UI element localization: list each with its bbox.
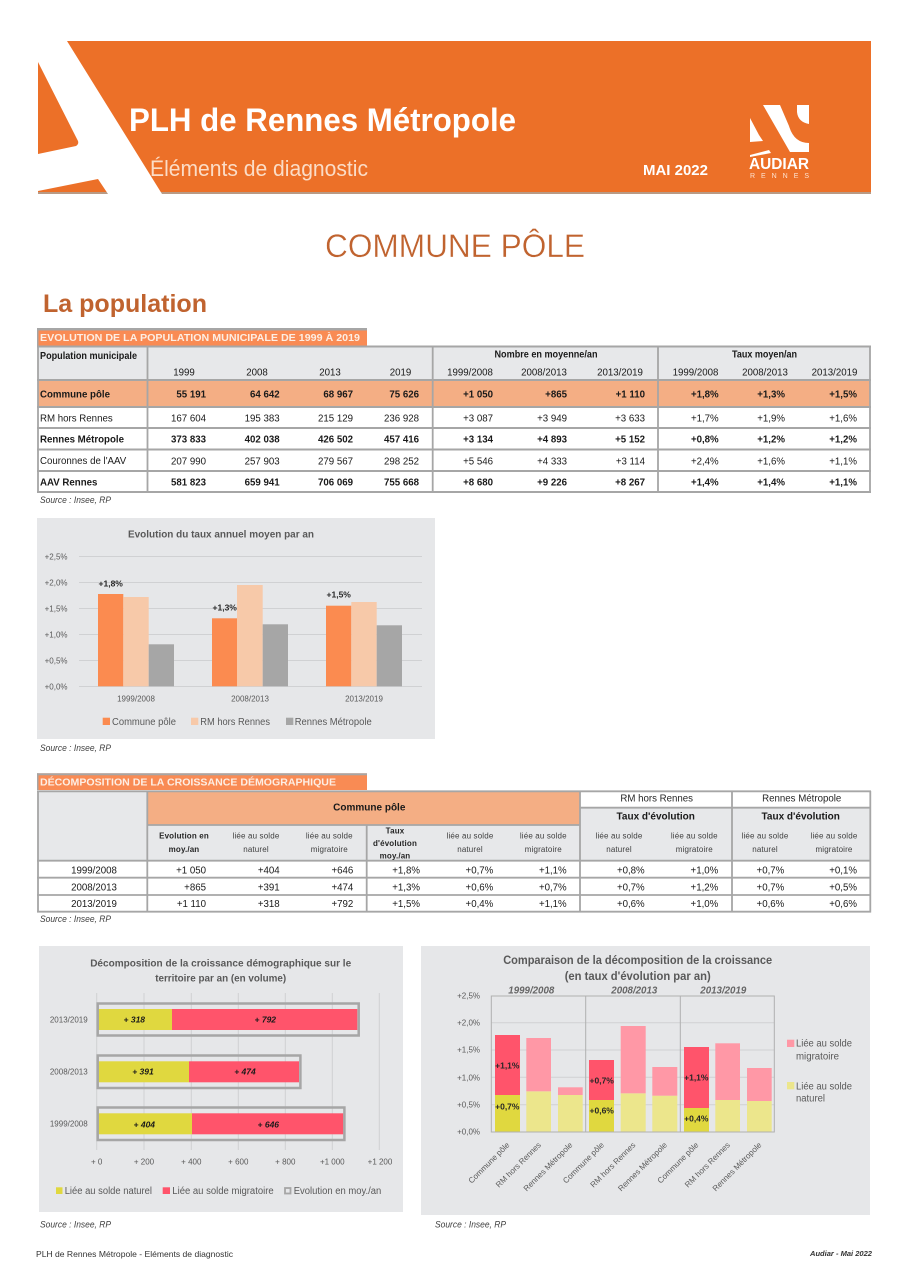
table heading: decomposition de la croissance: DÉCOMPOSITION DE LA CROISSANCE DÉMOGRAPHIQUE bbox=[40, 776, 336, 788]
row: 1999/2008: +404 bbox=[258, 865, 280, 876]
x axis labels: + 200 bbox=[134, 1157, 155, 1166]
column sub-headers: liée au solde bbox=[306, 832, 353, 841]
legend: RM hors Rennes bbox=[200, 717, 270, 728]
x axis labels bbox=[91, 1157, 393, 1166]
row: Rennes Métropole: +4 893 bbox=[537, 435, 568, 446]
y axis labels: 1999/2008 bbox=[50, 1119, 88, 1128]
column headers: Taux moyen/an bbox=[732, 350, 797, 360]
row: RM hors Rennes: +3 087 bbox=[463, 414, 493, 425]
column headers: 1999/2008 bbox=[673, 368, 718, 378]
row: 1999/2008: +1,1% bbox=[539, 865, 567, 876]
table heading: evolution de la population bbox=[37, 328, 367, 346]
banner date: MAI 2022 bbox=[643, 162, 708, 179]
y axis labels bbox=[45, 552, 68, 692]
group headers bbox=[333, 794, 841, 822]
row: 2013/2019: +0,4% bbox=[466, 899, 494, 910]
row: Rennes Métropole: 373 833 bbox=[171, 435, 207, 446]
column sub-headers: migratoire bbox=[311, 845, 348, 854]
row: Commune pôle: +1,5% bbox=[829, 390, 857, 401]
rotated category labels: RM hors Rennes bbox=[683, 1141, 732, 1189]
column headers: Nombre en moyenne/an bbox=[494, 350, 598, 360]
row: AAV Rennes: +9 226 bbox=[537, 478, 568, 489]
row: AAV Rennes: 755 668 bbox=[384, 478, 420, 489]
legend: naturel bbox=[796, 1094, 825, 1105]
column headers: 2013/2019 bbox=[812, 368, 857, 378]
column sub-headers: naturel bbox=[243, 845, 269, 854]
data labels: +0,7% bbox=[495, 1101, 520, 1111]
legend: Liée au solde naturel bbox=[65, 1186, 152, 1197]
row: AAV Rennes: 706 069 bbox=[318, 478, 354, 489]
row: AAV Rennes: 581 823 bbox=[171, 478, 207, 489]
column sub-headers: naturel bbox=[457, 845, 483, 854]
group headers: RM hors Rennes bbox=[620, 794, 693, 805]
data labels bbox=[495, 1060, 709, 1123]
chart title: Décomposition de la croissance démographique sur le bbox=[90, 958, 351, 970]
row: RM hors Rennes: +1,7% bbox=[691, 414, 719, 425]
row: Couronnes de l'AAV bbox=[40, 456, 857, 467]
y axis labels: +1,0% bbox=[457, 1073, 480, 1082]
x axis labels: 2013/2019 bbox=[345, 694, 383, 703]
row: 2013/2019: +318 bbox=[258, 899, 280, 910]
row: 1999/2008 bbox=[71, 865, 857, 876]
column sub-headers: migratoire bbox=[676, 845, 713, 854]
row: Commune pôle: 68 967 bbox=[323, 390, 353, 401]
column headers: 2013 bbox=[319, 368, 341, 378]
legend: Evolution en moy./an bbox=[294, 1186, 381, 1197]
row: 2008/2013: +474 bbox=[331, 882, 354, 893]
row: 2008/2013 bbox=[71, 882, 857, 893]
row: 2013/2019: +1,1% bbox=[539, 899, 567, 910]
column sub-headers: migratoire bbox=[525, 845, 562, 854]
column sub-headers: Evolution en bbox=[159, 832, 209, 841]
row: Commune pôle: +1,3% bbox=[757, 390, 785, 401]
row: Rennes Métropole: 457 416 bbox=[384, 435, 420, 446]
legend: Liée au solde bbox=[796, 1039, 852, 1050]
column sub-headers: Taux bbox=[386, 826, 405, 835]
legend: Liée au solde migratoire bbox=[172, 1186, 274, 1197]
chart: evolution du taux annuel moyen bbox=[37, 518, 435, 739]
period labels: 1999/2008 bbox=[508, 985, 555, 996]
period labels: 2008/2013 bbox=[610, 985, 658, 996]
column sub-headers: liée au solde bbox=[520, 832, 567, 841]
chart title: territoire par an (en volume) bbox=[155, 973, 286, 985]
column sub-headers: liée au solde bbox=[447, 832, 494, 841]
row: AAV Rennes bbox=[40, 478, 857, 489]
rotated category labels: Commune pôle bbox=[656, 1140, 701, 1185]
row: 1999/2008: +0,8% bbox=[617, 865, 645, 876]
row: Rennes Métropole bbox=[40, 435, 857, 446]
row: Couronnes de l'AAV: 298 252 bbox=[384, 456, 419, 467]
stacked bar 1999/2008: + 646 bbox=[258, 1119, 279, 1129]
rotated category labels: RM hors Rennes bbox=[589, 1141, 637, 1189]
row: AAV Rennes: +8 680 bbox=[463, 478, 493, 489]
group headers: Rennes Métropole bbox=[762, 794, 841, 805]
row: Commune pôle: 55 191 bbox=[176, 390, 207, 401]
legend: migratoire bbox=[796, 1051, 839, 1062]
legend bbox=[787, 1039, 852, 1105]
row: Commune pôle: 75 626 bbox=[389, 390, 420, 401]
bars bbox=[98, 585, 402, 686]
row: AAV Rennes: +1,1% bbox=[829, 478, 857, 489]
row: 2008/2013: +1,3% bbox=[392, 882, 420, 893]
source note: Source : Insee, RP bbox=[40, 1219, 112, 1230]
row: RM hors Rennes: RM hors Rennes bbox=[40, 414, 113, 425]
column sub-headers: migratoire bbox=[815, 845, 853, 854]
row: Commune pôle: +865 bbox=[545, 390, 568, 401]
stacked bar 2013/2019 bbox=[98, 1004, 359, 1036]
column headers: Population municipale bbox=[40, 351, 138, 362]
row: 2013/2019: +0,6% bbox=[617, 899, 645, 910]
row: 2008/2013: +1,2% bbox=[691, 882, 719, 893]
y axis labels: 2013/2019 bbox=[50, 1015, 88, 1024]
rotated category labels: RM hors Rennes bbox=[494, 1141, 543, 1189]
data labels: +1,3% bbox=[213, 603, 237, 613]
stacked bar 2013/2019: + 792 bbox=[255, 1014, 276, 1024]
table heading: evolution de la population: EVOLUTION DE LA POPULATION MUNICIPALE DE 1999 À 2019 bbox=[40, 331, 360, 344]
row: 1999/2008: +0,1% bbox=[829, 865, 857, 876]
stacked bar 2013/2019: + 318 bbox=[124, 1014, 145, 1024]
row: Rennes Métropole: +5 152 bbox=[615, 435, 645, 446]
row: Commune pôle: Commune pôle bbox=[40, 390, 111, 401]
row: 2008/2013: +0,7% bbox=[757, 882, 785, 893]
y axis labels: +2,0% bbox=[457, 1018, 480, 1027]
logo: Audiar Rennes: AUDIAR bbox=[749, 156, 809, 173]
row: Rennes Métropole: +1,2% bbox=[757, 435, 785, 446]
column sub-headers: liée au solde bbox=[596, 832, 643, 841]
legend: Rennes Métropole bbox=[295, 717, 372, 728]
row: Couronnes de l'AAV: +4 333 bbox=[537, 456, 567, 467]
row: Commune pôle: +1 050 bbox=[463, 390, 493, 401]
column sub-headers: liée au solde bbox=[742, 832, 789, 841]
stacked bar 2008/2013: + 474 bbox=[234, 1066, 256, 1076]
row: 1999/2008: +0,7% bbox=[466, 865, 494, 876]
source note: Source : Insee, RP bbox=[435, 1219, 507, 1230]
banner title: PLH de Rennes Métropole bbox=[129, 102, 516, 138]
banner subtitle: Éléments de diagnostic bbox=[150, 156, 368, 181]
table: population municipale bbox=[37, 346, 871, 493]
column sub-headers: liée au solde bbox=[811, 832, 858, 841]
row: 2013/2019: +1,5% bbox=[392, 899, 420, 910]
data labels: +1,8% bbox=[99, 579, 123, 589]
column headers: 1999 bbox=[173, 368, 195, 378]
row: AAV Rennes: +8 267 bbox=[615, 478, 645, 489]
row: 1999/2008: 1999/2008 bbox=[71, 865, 117, 876]
row: Couronnes de l'AAV: +5 546 bbox=[463, 456, 493, 467]
legend bbox=[56, 1186, 381, 1197]
legend: Commune pôle bbox=[112, 717, 176, 728]
row: Couronnes de l'AAV: 207 990 bbox=[171, 456, 207, 467]
data labels: +1,1% bbox=[684, 1072, 709, 1082]
row: AAV Rennes: 659 941 bbox=[245, 478, 280, 489]
header banner bbox=[38, 41, 871, 194]
source note: Source : Insee, RP bbox=[40, 914, 112, 925]
y axis labels: +0,5% bbox=[457, 1101, 480, 1110]
row: 1999/2008: +646 bbox=[331, 865, 353, 876]
rotated category labels: Commune pôle bbox=[467, 1140, 512, 1185]
group headers: Taux d'évolution bbox=[762, 811, 840, 822]
row: RM hors Rennes: 215 129 bbox=[318, 414, 353, 425]
column headers bbox=[40, 350, 857, 378]
y axis labels: +0,0% bbox=[457, 1128, 480, 1137]
footer left: PLH de Rennes Métropole - Eléments de diagnostic bbox=[36, 1249, 234, 1259]
column sub-headers: liée au solde bbox=[233, 832, 280, 841]
x axis labels: + 800 bbox=[275, 1157, 296, 1166]
row: 2013/2019: +1 110 bbox=[177, 899, 207, 910]
row: Rennes Métropole: 426 502 bbox=[318, 435, 353, 446]
chart title bbox=[90, 958, 351, 985]
y axis labels: +2,5% bbox=[45, 552, 68, 562]
row: Commune pôle bbox=[40, 390, 857, 401]
row: 1999/2008: +1,8% bbox=[392, 865, 420, 876]
row: Couronnes de l'AAV: +3 114 bbox=[616, 456, 646, 467]
chart title bbox=[503, 955, 772, 983]
legend bbox=[103, 717, 372, 728]
row: 2013/2019: +0,6% bbox=[757, 899, 785, 910]
row: Rennes Métropole: +1,2% bbox=[829, 435, 857, 446]
row: 2013/2019: +1,0% bbox=[691, 899, 719, 910]
row: Commune pôle: 64 642 bbox=[250, 390, 280, 401]
x axis labels: 2008/2013 bbox=[231, 694, 269, 703]
table heading: decomposition de la croissance bbox=[37, 773, 367, 790]
row: 2013/2019: 2013/2019 bbox=[71, 899, 117, 910]
x axis labels: +1 000 bbox=[320, 1157, 345, 1166]
row: Commune pôle: +1 110 bbox=[616, 390, 645, 401]
row: 2008/2013: 2008/2013 bbox=[71, 882, 117, 893]
y axis labels: +0,5% bbox=[45, 656, 68, 666]
y axis labels: +2,5% bbox=[457, 991, 480, 1000]
row: 2008/2013: +865 bbox=[184, 882, 206, 893]
stacked bar 1999/2008 bbox=[98, 1108, 344, 1140]
x axis labels bbox=[117, 694, 383, 703]
y axis labels: +1,0% bbox=[45, 630, 68, 640]
column headers: 2019 bbox=[390, 368, 411, 378]
row: Couronnes de l'AAV: 279 567 bbox=[318, 456, 353, 467]
column headers: 1999/2008 bbox=[447, 368, 493, 378]
period labels bbox=[508, 985, 747, 996]
row: RM hors Rennes: 167 604 bbox=[171, 414, 207, 425]
row: RM hors Rennes: 236 928 bbox=[384, 414, 419, 425]
y axis labels bbox=[457, 991, 480, 1137]
row: RM hors Rennes: +3 633 bbox=[615, 414, 645, 425]
column headers: 2013/2019 bbox=[597, 368, 643, 378]
x axis labels: + 0 bbox=[91, 1157, 103, 1166]
row: RM hors Rennes: +1,9% bbox=[757, 414, 785, 425]
x axis labels: + 600 bbox=[228, 1157, 249, 1166]
data labels bbox=[99, 579, 351, 613]
rotated category labels bbox=[467, 1140, 764, 1193]
period labels: 2013/2019 bbox=[699, 985, 747, 996]
chart: decomposition en volume bbox=[39, 946, 403, 1212]
row: Couronnes de l'AAV: 257 903 bbox=[245, 456, 280, 467]
row: 1999/2008: +1 050 bbox=[176, 865, 207, 876]
rotated category labels: Rennes Métropole bbox=[711, 1140, 764, 1193]
stacked bar 2008/2013: + 391 bbox=[132, 1066, 154, 1076]
data labels: +1,5% bbox=[327, 590, 351, 600]
rotated category labels: Commune pôle bbox=[561, 1140, 606, 1185]
row: RM hors Rennes: +1,6% bbox=[829, 414, 857, 425]
row: RM hors Rennes: 195 383 bbox=[245, 414, 280, 425]
row: 2013/2019: +792 bbox=[331, 899, 353, 910]
logo: Audiar Rennes: RENNES bbox=[750, 173, 809, 180]
rotated category labels: Rennes Métropole bbox=[522, 1140, 575, 1193]
column headers: 2008/2013 bbox=[521, 368, 567, 378]
row: 1999/2008: +1,0% bbox=[691, 865, 719, 876]
row: Commune pôle: +1,8% bbox=[691, 390, 719, 401]
data labels: +0,7% bbox=[590, 1076, 614, 1086]
column sub-headers bbox=[159, 826, 858, 860]
row: 2008/2013: +0,7% bbox=[539, 882, 567, 893]
column headers: 2008 bbox=[246, 368, 268, 378]
page title: COMMUNE PÔLE bbox=[325, 228, 585, 264]
row: Couronnes de l'AAV: +1,6% bbox=[757, 456, 785, 467]
row: 2008/2013: +0,6% bbox=[466, 882, 494, 893]
stacked bar 1999/2008: + 404 bbox=[134, 1119, 155, 1129]
row: Rennes Métropole: 402 038 bbox=[245, 435, 280, 446]
logo: Audiar Rennes bbox=[749, 105, 809, 180]
icon: large white A shape bbox=[38, 41, 162, 194]
row: AAV Rennes: +1,4% bbox=[757, 478, 785, 489]
column sub-headers: moy./an bbox=[380, 851, 410, 860]
y axis labels: +1,5% bbox=[45, 604, 68, 614]
y axis labels: 2008/2013 bbox=[50, 1067, 88, 1076]
column sub-headers: naturel bbox=[606, 845, 632, 854]
row: Couronnes de l'AAV: +1,1% bbox=[829, 456, 857, 467]
row: 2008/2013: +391 bbox=[258, 882, 280, 893]
source note: Source : Insee, RP bbox=[40, 495, 112, 506]
row: 2008/2013: +0,5% bbox=[829, 882, 857, 893]
stacked bar 2008/2013 bbox=[98, 1056, 300, 1088]
legend: Liée au solde bbox=[796, 1081, 852, 1092]
data labels: +1,1% bbox=[495, 1060, 520, 1070]
column sub-headers: liée au solde bbox=[671, 832, 718, 841]
column headers: 2008/2013 bbox=[742, 368, 788, 378]
chart: comparaison en taux d'evolution bbox=[421, 946, 870, 1215]
row: AAV Rennes: AAV Rennes bbox=[40, 478, 97, 489]
chart title: Comparaison de la décomposition de la croissance bbox=[503, 955, 772, 967]
row: 2013/2019: +0,6% bbox=[829, 899, 857, 910]
data labels: +0,6% bbox=[590, 1105, 614, 1115]
row: 2013/2019 bbox=[71, 899, 857, 910]
section heading: La population bbox=[43, 290, 207, 318]
row: AAV Rennes: +1,4% bbox=[691, 478, 719, 489]
y axis labels: +0,0% bbox=[45, 682, 68, 692]
rotated category labels: Rennes Métropole bbox=[616, 1140, 669, 1193]
chart title: (en taux d'évolution par an) bbox=[565, 971, 711, 983]
y axis labels: +1,5% bbox=[457, 1046, 480, 1055]
row: RM hors Rennes: +3 949 bbox=[537, 414, 567, 425]
chart title: Evolution du taux annuel moyen par an bbox=[128, 529, 314, 541]
data labels: +0,4% bbox=[684, 1113, 709, 1123]
row: Rennes Métropole: +3 134 bbox=[463, 435, 494, 446]
y axis labels: +2,0% bbox=[45, 578, 68, 588]
source note: Source : Insee, RP bbox=[40, 743, 112, 754]
column sub-headers: d'évolution bbox=[373, 839, 417, 848]
x axis labels: +1 200 bbox=[368, 1157, 393, 1166]
column sub-headers: naturel bbox=[752, 845, 778, 854]
footer right: Audiar - Mai 2022 bbox=[809, 1249, 873, 1258]
group headers: Commune pôle bbox=[333, 803, 406, 814]
row: Rennes Métropole: +0,8% bbox=[691, 435, 719, 446]
stacked bars bbox=[495, 1026, 772, 1132]
row: 2008/2013: +0,7% bbox=[617, 882, 645, 893]
x axis labels: + 400 bbox=[181, 1157, 202, 1166]
x axis labels: 1999/2008 bbox=[117, 694, 155, 703]
row: Rennes Métropole: Rennes Métropole bbox=[40, 435, 125, 446]
y axis labels bbox=[50, 1015, 88, 1128]
row: RM hors Rennes bbox=[40, 414, 857, 425]
group headers: Taux d'évolution bbox=[617, 811, 695, 822]
table: decomposition bbox=[37, 791, 871, 912]
column sub-headers: moy./an bbox=[169, 845, 199, 854]
row: Couronnes de l'AAV: +2,4% bbox=[691, 456, 719, 467]
row: Couronnes de l'AAV: Couronnes de l'AAV bbox=[40, 456, 127, 467]
row: 1999/2008: +0,7% bbox=[757, 865, 785, 876]
